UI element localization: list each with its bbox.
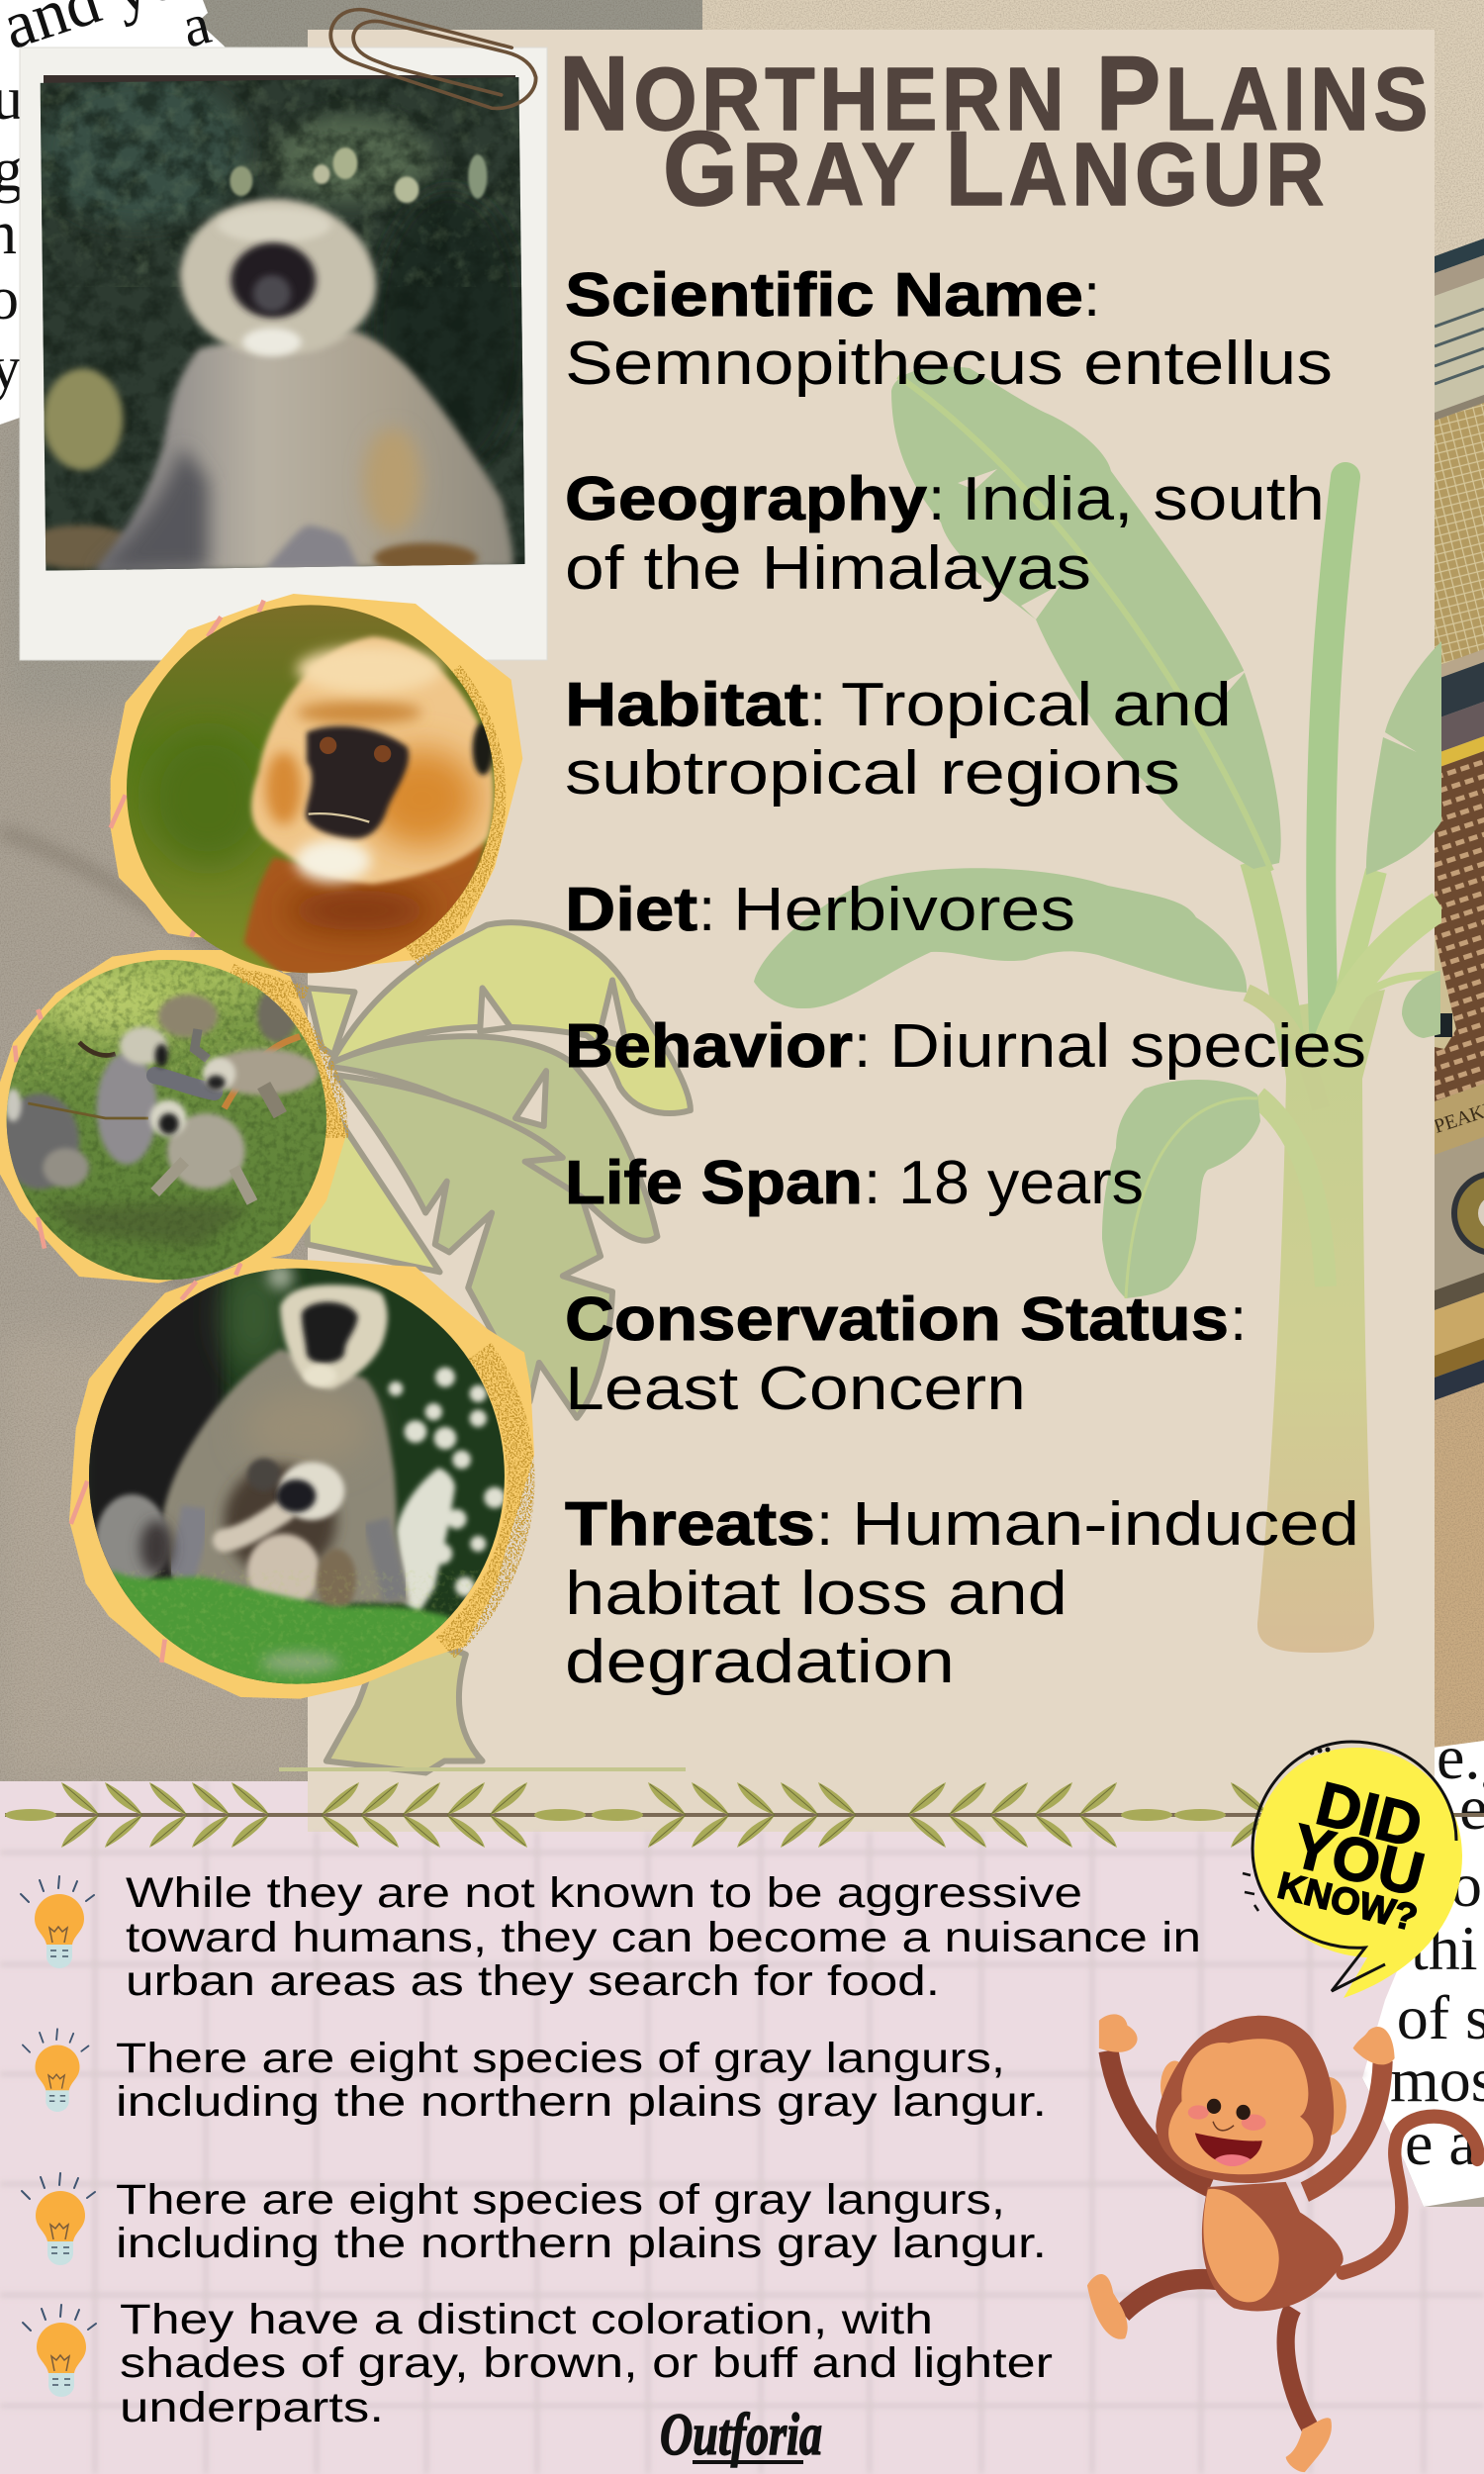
polaroid photo: langur portrait [20,48,547,660]
fact: scientific name: Scientific Name [565,261,1083,330]
monkey head [180,199,376,353]
fact: habitat: : [809,671,826,739]
ears [1160,2060,1189,2112]
photo circle: golden langur [111,594,522,995]
fact 4: icon and text: They have a distinct coloration, with [120,2296,933,2343]
fact: scientific name [565,261,1333,398]
callout: did you know bubble: YOU [1285,1811,1431,1910]
top yellow leaf [308,922,691,1113]
fact: threats: habitat loss and [565,1560,1067,1628]
fact: life span: : [864,1149,881,1217]
fur [251,636,494,884]
fact 3: icon and text: There are eight species of gray langurs, [116,2176,1005,2224]
mother head [280,1285,388,1388]
fact: habitat: subtropical regions [565,739,1180,808]
leaf garland divider [5,1782,1484,1848]
mother [161,1349,409,1603]
decorative thin ground line [279,1767,686,1771]
face [306,726,409,838]
trunk left [326,1639,483,1772]
langur E [158,995,218,1037]
stems [1241,462,1441,1146]
callout: did you know bubble: KNOW? [1273,1865,1422,1940]
horizontal leaf [754,868,1247,1008]
langur B [167,1113,245,1189]
fact: behavior: Diurnal species [889,1012,1366,1081]
fact: conservation status: Conservation Status [565,1285,1229,1354]
feet [1087,2274,1128,2339]
fact: diet [565,876,1075,944]
fact: geography: : [928,465,945,533]
monkey body [95,331,513,572]
fact: threats: Threats [565,1490,815,1559]
fact 1: icon and text: While they are not known to be aggressive [126,1869,1082,1917]
fact: diet: Diet [565,876,697,944]
fact: life span [565,1149,1144,1217]
vintage radio photo strip [1432,238,1484,1400]
fact: diet: Herbivores [733,876,1075,944]
newspaper scrap: right: thi [1411,1913,1478,1983]
callout: did you know bubble: DID [1310,1769,1429,1861]
fact: threats: degradation [565,1628,955,1696]
fact: habitat: Habitat [565,671,808,739]
langur D [0,1094,79,1189]
newspaper scrap: right: e a [1405,2108,1477,2178]
grass [102,1570,465,1692]
panel: pink grid note paper [0,1781,1484,2474]
lower yellow leaf [308,1118,440,1272]
title: GRAY LANGUR [663,109,1329,228]
illustration: cartoon monkey [1087,2014,1478,2472]
trunk [1257,990,1385,1653]
callout: did you know bubble [1243,1742,1462,1998]
title [559,34,1433,228]
illustration: banana plant, left [308,922,691,1772]
fact 2: icon and text [23,2029,1047,2126]
title: NORTHERN PLAINS [559,34,1433,152]
tail [1343,2117,1478,2273]
fact: geography: of the Himalayas [565,534,1091,603]
fact: geography: India, south [962,465,1325,533]
fact: diet: : [698,876,715,944]
fact 2: icon and text: including the northern plains gray langur. [116,2078,1047,2126]
fact: threats: Human-induced [852,1490,1359,1559]
baby [247,1534,320,1606]
fact 4: icon and text: underparts. [120,2384,384,2431]
illustration: banana plant, right [754,367,1441,1653]
fact: conservation status: : [1230,1285,1247,1354]
fact: behavior [565,1012,1366,1081]
fact 1: icon and text: toward humans, they can become a nuisance in [126,1914,1201,1961]
legs [1123,2279,1234,2314]
arms [1108,2050,1210,2187]
langur A [97,1052,157,1165]
fact: conservation status [565,1285,1247,1423]
photo circle: mother and baby langur [69,1257,534,1699]
fact: life span: 18 years [898,1149,1144,1217]
fact 4: icon and text: shades of gray, brown, or buff and lighter [120,2339,1053,2387]
body [1202,2182,1344,2311]
fact: behavior: : [854,1012,871,1081]
fact: habitat [565,671,1232,808]
panel: beige info card [308,30,1435,1832]
fact 1: icon and text [21,1869,1201,2005]
photo circle: group of langurs [0,950,346,1286]
fact: scientific name: : [1083,261,1100,330]
fact: conservation status: Least Concern [565,1355,1026,1423]
icon: paperclip [330,10,536,108]
fact: threats: : [816,1490,833,1559]
small leaf [1402,971,1440,1038]
big leaf [891,367,1281,869]
big olive leaf [335,1075,612,1418]
notches [480,980,626,1126]
fact: geography: Geography [565,465,928,533]
fact 3: icon and text [22,2173,1047,2267]
fact: scientific name: Semnopithecus entellus [565,330,1333,398]
fact 3: icon and text: including the northern plains gray langur. [116,2220,1047,2267]
fact 1: icon and text: urban areas as they search for food. [126,1957,940,2005]
fact: threats [565,1490,1359,1696]
fact 2: icon and text: There are eight species of gray langurs, [116,2035,1005,2082]
newspaper scrap: top left [0,0,237,425]
langur C [210,1049,319,1095]
logo: Outforia: Outforia [660,2402,822,2467]
fact: geography [565,465,1325,603]
olive leaf [331,1036,657,1241]
shoulders [244,841,485,977]
newspaper scrap: right [1362,1722,1484,2207]
fact: behavior: Behavior [565,1012,853,1081]
fact: habitat: Tropical and [841,671,1232,739]
head [1156,2016,1334,2183]
lower curved leaf [1102,1080,1260,1298]
fact: life span: Life Span [565,1149,863,1217]
fact 4: icon and text [23,2296,1053,2431]
face [1168,2039,1313,2174]
right leaf [1366,641,1441,875]
hands [1099,2014,1138,2052]
